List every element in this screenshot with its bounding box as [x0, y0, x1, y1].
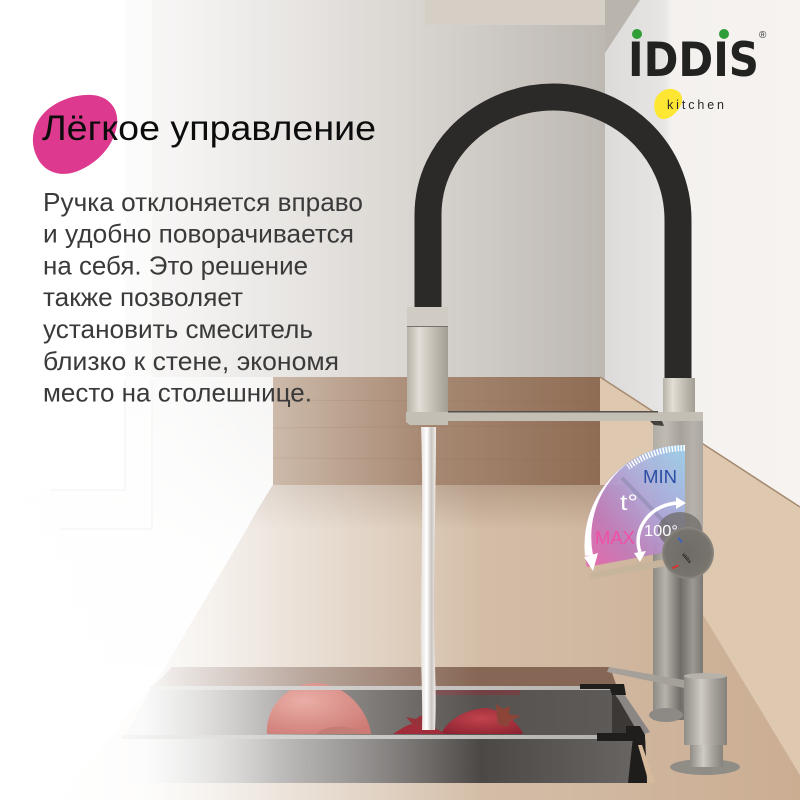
body text: Ручка отклоняется вправо [43, 187, 363, 217]
body text [43, 187, 363, 408]
countertop [60, 485, 800, 800]
body text: также позволяет [43, 282, 243, 312]
body text: близко к стене, экономя [43, 346, 339, 376]
window frame hint [50, 380, 152, 529]
100 degree rotation arrow: 100° [644, 523, 678, 540]
faucet hose [428, 97, 678, 382]
faucet left collar and arm [406, 307, 703, 426]
label: MIN: MIN [643, 467, 677, 487]
handle knob: iddis [680, 552, 692, 565]
logo green dots [632, 29, 729, 39]
lever handle [590, 478, 672, 579]
heading accent blob [33, 95, 117, 174]
water stream [421, 427, 436, 730]
yellow blob [654, 89, 682, 119]
100 degree rotation arrow [634, 497, 686, 562]
temperature fan with min and max [584, 445, 685, 571]
logo wordmark: IDDIS [628, 33, 759, 88]
label: MAX: MAX [595, 528, 635, 548]
soap dispenser [607, 667, 740, 775]
label: temperature: t° [620, 490, 638, 515]
pomegranates [267, 683, 523, 734]
body text: на себя. Это решение [43, 250, 308, 280]
body text: место на столешнице. [43, 378, 312, 408]
kitchen label: kitchen [667, 98, 724, 112]
upper cabinet [425, 0, 640, 53]
body text: и удобно поворачивается [43, 219, 354, 249]
strainer rack [122, 684, 650, 741]
white fade over left side [60, 485, 462, 800]
logo: IDDIS kitchen [628, 29, 767, 119]
registered mark: ® [759, 30, 767, 41]
wooden backsplash [273, 377, 800, 775]
heading: Лёгкое управление [42, 109, 376, 148]
handle knob [658, 512, 714, 579]
sink [125, 667, 655, 783]
body text: установить смеситель [43, 314, 313, 344]
faucet pole [649, 378, 703, 722]
